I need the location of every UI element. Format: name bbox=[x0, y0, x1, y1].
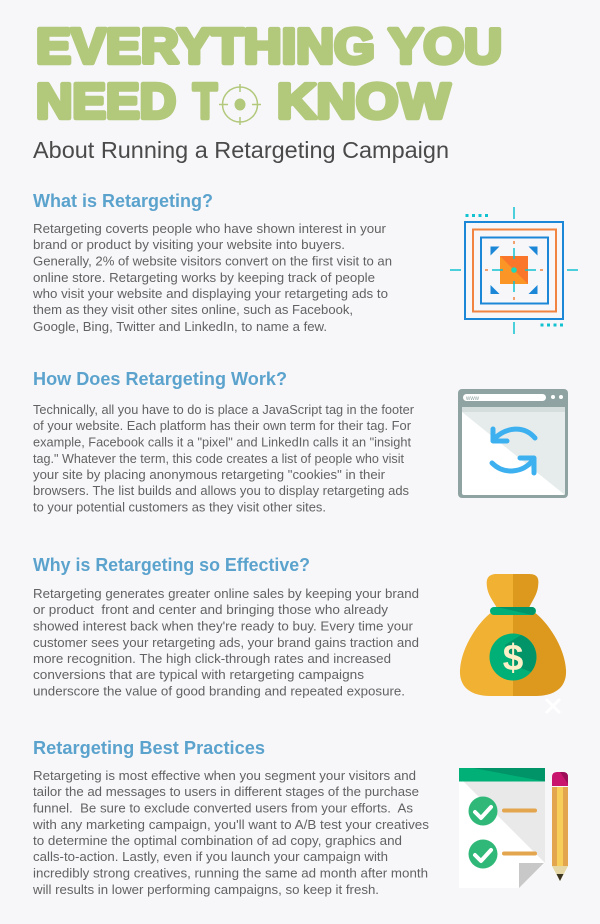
text block: funnel. Be sure to exclude converted users from your efforts. As bbox=[33, 800, 414, 816]
text block: conversions that are typical with retargeting campaigns bbox=[33, 667, 365, 682]
title: T bbox=[193, 75, 217, 129]
text block: customer sees your retargeting ads, your brand gains traction and bbox=[33, 635, 419, 650]
text block: showed interest back when they're ready to buy. Every time your bbox=[33, 618, 414, 634]
panel: how does retargeting work bbox=[33, 368, 568, 514]
panel: what is retargeting bbox=[32, 190, 578, 334]
heading: How Does Retargeting Work? bbox=[33, 368, 287, 389]
text block: incredibly strong creatives, running the same ad month after month bbox=[33, 866, 428, 880]
heading: What is Retargeting? bbox=[33, 190, 213, 211]
text block: online store. Retargeting works by keeping track of people bbox=[33, 270, 375, 285]
icon: browser window with refresh arrows bbox=[458, 389, 568, 498]
text block: browsers. The list builds and allows you to display retargeting ads bbox=[33, 483, 409, 498]
title: KNOW bbox=[277, 75, 451, 129]
text block: calls-to-action. Lastly, even if you launch your campaign with bbox=[33, 849, 388, 864]
text block: them as they visit other sites online, such as Facebook, bbox=[33, 302, 353, 317]
text block bbox=[33, 586, 419, 698]
heading: Retargeting Best Practices bbox=[33, 737, 265, 758]
text block: tag." Whatever the term, this code creates a list of people who visit bbox=[33, 451, 404, 466]
text block: of your website. Each platform has their own term for their tag. For bbox=[33, 418, 412, 433]
heading: Why is Retargeting so Effective? bbox=[33, 554, 310, 575]
text block: to determine the optimal combination of ad copy, graphics and bbox=[33, 833, 402, 848]
text block bbox=[33, 402, 415, 514]
text block: who visit your website and displaying your retargeting ads to bbox=[32, 286, 388, 301]
icon: money bag bbox=[460, 574, 566, 713]
text block: Retargeting generates greater online sales by keeping your brand bbox=[33, 586, 419, 601]
icon: pencil bbox=[552, 772, 568, 881]
text block bbox=[32, 221, 392, 334]
title bbox=[36, 20, 502, 129]
subtitle: About Running a Retargeting Campaign bbox=[33, 137, 449, 163]
icon: target squares bbox=[450, 207, 578, 334]
text block: tailor the ad messages to users in different stages of the purchase bbox=[33, 784, 419, 799]
text block: or product front and center and bringing those who already bbox=[33, 602, 389, 617]
text block bbox=[32, 768, 430, 897]
text block: Technically, all you have to do is place a JavaScript tag in the footer bbox=[33, 402, 415, 417]
text block: Generally, 2% of website visitors convert on the first visit to an bbox=[33, 254, 392, 268]
icon: browser window with refresh arrows: www bbox=[465, 396, 480, 402]
text block: underscore the value of good branding and repeated exposure. bbox=[33, 684, 405, 698]
title: NEED bbox=[36, 75, 176, 129]
text block: to your potential customers as they visit other sites. bbox=[33, 500, 326, 514]
title: EVERYTHING YOU bbox=[36, 20, 502, 74]
text block: your site by placing anonymous retargeting "cookies" in their bbox=[33, 467, 386, 482]
text block: more recognition. The high click-through rates and increased bbox=[33, 651, 391, 666]
text block: will results in lower performing campaigns, so keep it fresh. bbox=[32, 882, 379, 897]
icon: target as letter O bbox=[219, 84, 261, 125]
panel: why is retargeting so effective bbox=[33, 554, 566, 713]
text block: example, Facebook calls it a "pixel" and LinkedIn calls it an "insight bbox=[33, 434, 411, 450]
text block: Google, Bing, Twitter and LinkedIn, to name a few. bbox=[33, 319, 327, 334]
icon: money bag: $ bbox=[503, 637, 524, 678]
icon: checklist bbox=[459, 768, 545, 888]
text block: Retargeting is most effective when you segment your visitors and bbox=[33, 768, 416, 783]
panel: retargeting best practices bbox=[32, 737, 568, 897]
text block: with any marketing campaign, you'll want to A/B test your creatives bbox=[32, 817, 430, 832]
text block: brand or product by visiting your website into buyers. bbox=[33, 237, 345, 252]
text block: Retargeting coverts people who have shown interest in your bbox=[33, 221, 387, 236]
